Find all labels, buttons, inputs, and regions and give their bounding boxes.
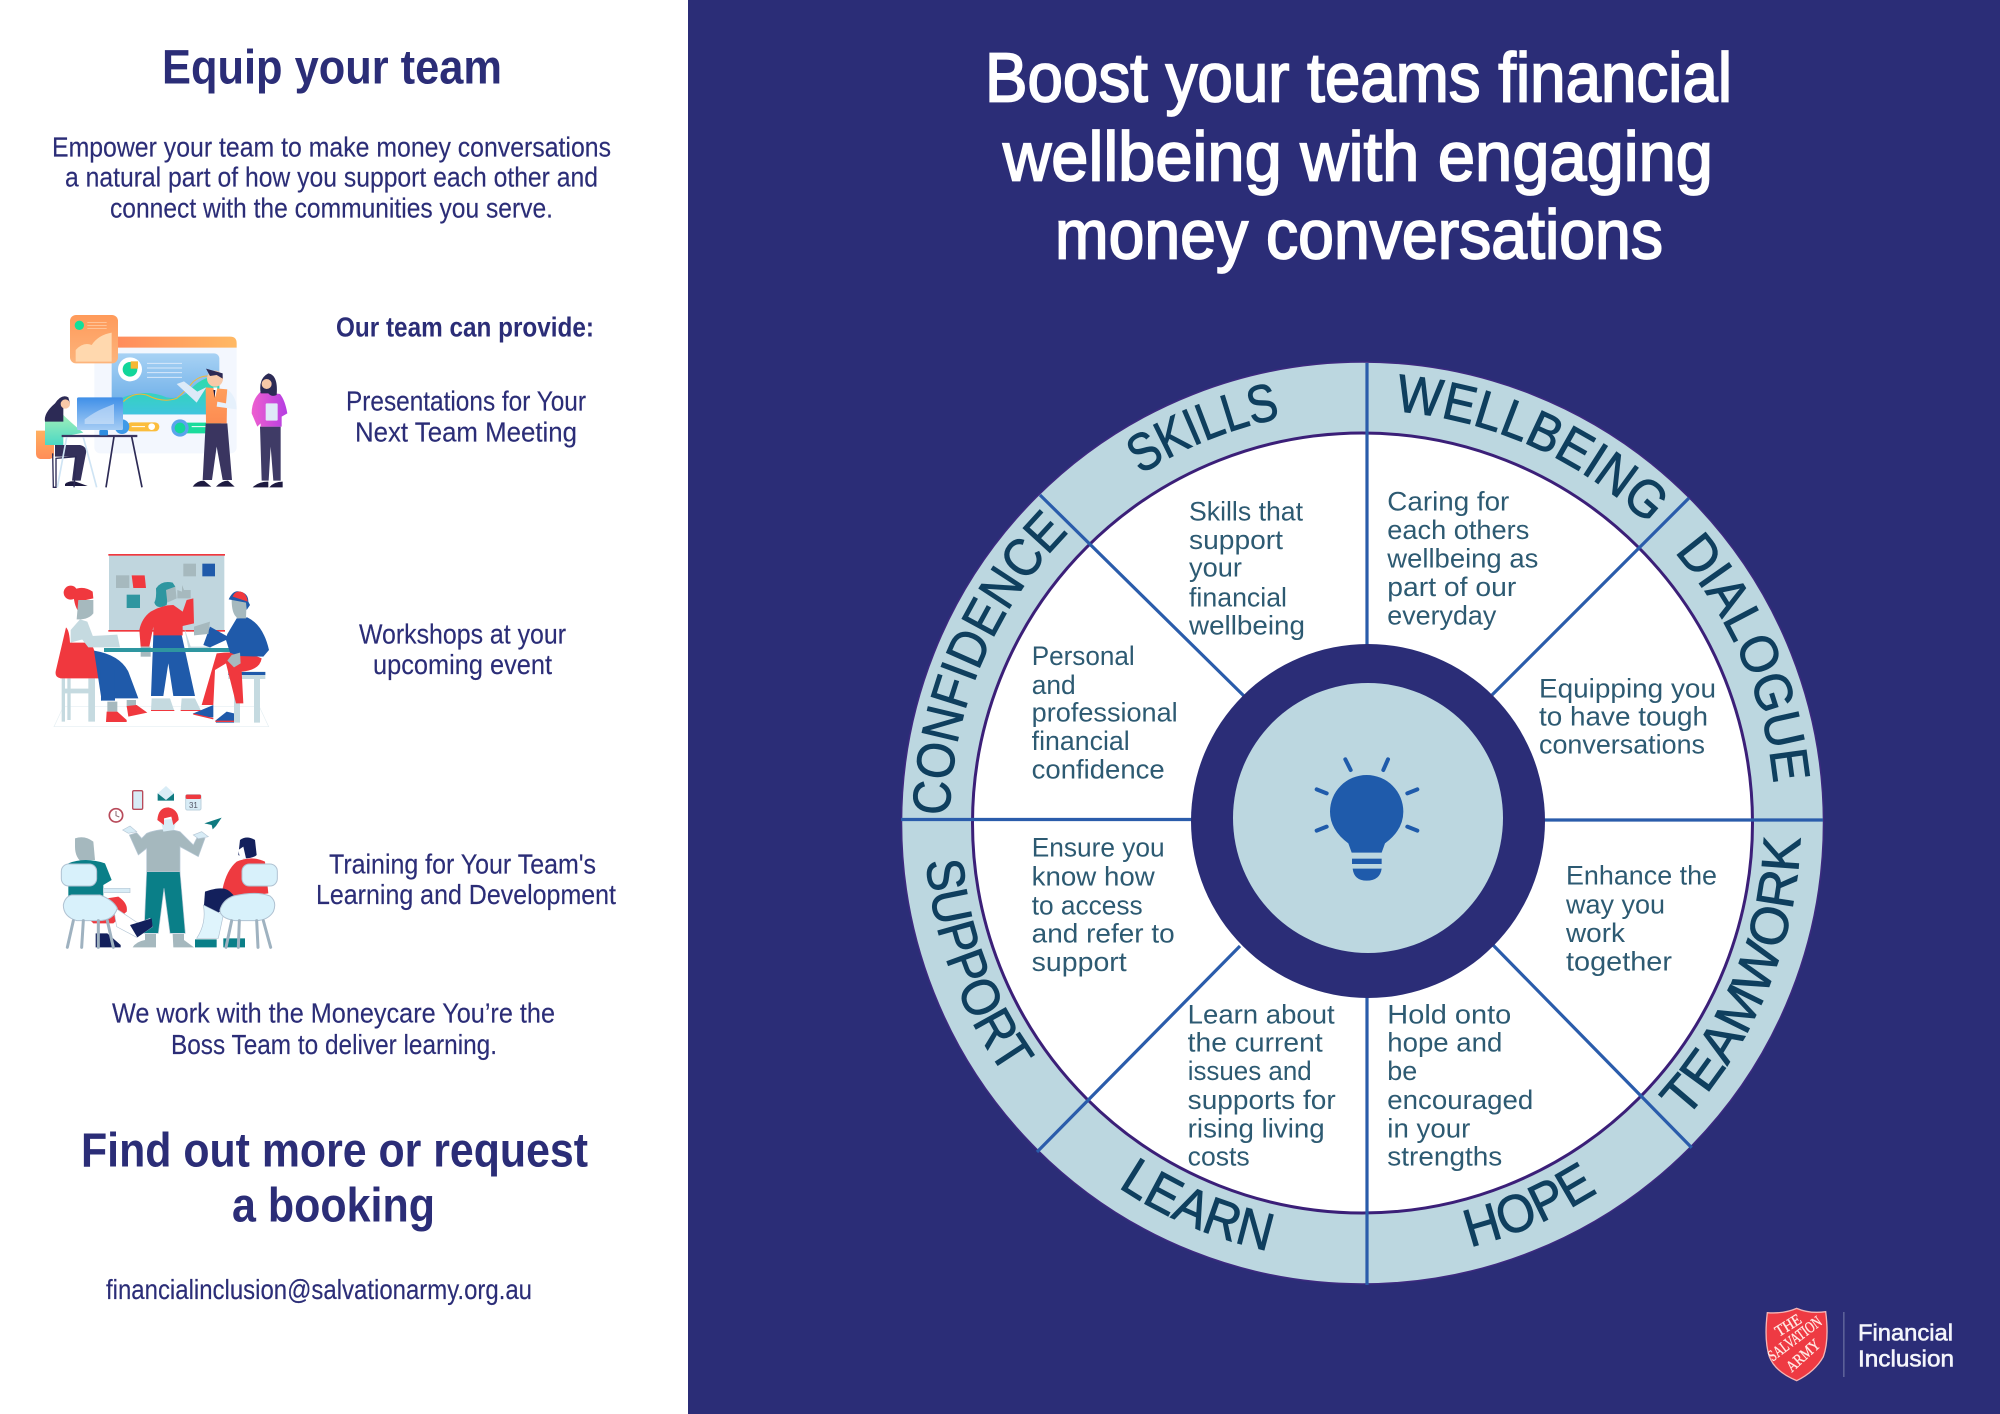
segment text: confidence: financial	[1032, 726, 1130, 756]
icon: red shield	[1766, 1308, 1827, 1381]
text: Workshops at your upcoming event: Workshops at your	[359, 618, 566, 649]
illustration: training conversation: 31	[189, 801, 198, 810]
segment text: teamwork: work	[1565, 918, 1626, 948]
title: wellbeing with engaging	[1002, 118, 1713, 196]
segment text: wellbeing: everyday	[1387, 600, 1497, 630]
illustration: training conversation	[61, 786, 277, 947]
segment text: learn: the current	[1188, 1028, 1323, 1058]
segment text: skills: your	[1189, 553, 1242, 583]
heading: find out more	[81, 1125, 588, 1233]
intro paragraph: connect with the communities you serve.	[110, 192, 553, 223]
segment text: skills	[1188, 497, 1305, 640]
logo: Salvation Army Financial Inclusion	[1765, 1308, 1954, 1381]
panel: left white column	[0, 0, 688, 1414]
text: Training for your team's learning and development: Learning and Development	[316, 879, 616, 910]
heading: find out more: a booking	[232, 1180, 435, 1233]
segment text: learn: costs	[1188, 1142, 1250, 1172]
segment text: hope: encouraged	[1387, 1085, 1533, 1115]
ring label: LEARN: LEARN	[1120, 1158, 1274, 1251]
title	[985, 39, 1732, 274]
segment text: skills: financial	[1189, 583, 1287, 613]
logo wordmark	[1858, 1320, 1954, 1372]
logo wordmark: Financial	[1858, 1320, 1953, 1346]
panel: right navy background	[688, 0, 2000, 1414]
hub centre	[1233, 683, 1503, 953]
spokes	[901, 363, 1823, 1285]
segment text: support: to access	[1032, 890, 1143, 920]
text: Presentations for your next team meeting	[346, 386, 586, 448]
intro paragraph: Empower your team to make money conversations	[52, 132, 611, 163]
segment text: learn	[1188, 999, 1336, 1172]
logo divider	[1843, 1312, 1845, 1377]
icon: light bulb	[1317, 759, 1417, 881]
text: Presentations for your next team meeting: Next Team Meeting	[355, 417, 577, 448]
segment text: support	[1032, 833, 1175, 977]
segment text: hope: strengths	[1387, 1142, 1502, 1172]
ring label: SKILLS: SKILLS	[1128, 384, 1278, 470]
outer ring	[902, 362, 1824, 1284]
segment text: confidence: Personal	[1032, 641, 1135, 671]
segment text: skills: wellbeing	[1188, 610, 1305, 640]
text: Moneycare partnership note	[112, 998, 555, 1060]
segment text: dialogue: Equipping you	[1539, 674, 1716, 704]
right seated person	[238, 837, 257, 858]
text: Moneycare partnership note: We work with the Moneycare You’re the	[112, 998, 555, 1029]
illustration: workshop around a table	[54, 554, 269, 727]
segment text: support: and refer to	[1032, 919, 1175, 949]
segment text: support: know how	[1032, 862, 1156, 892]
shield wording: SALVATION	[1765, 1313, 1826, 1365]
shield wording	[1765, 1311, 1826, 1376]
segment text: hope: in your	[1387, 1114, 1470, 1144]
shield wording: ARMY	[1783, 1336, 1824, 1376]
standing person	[144, 872, 185, 933]
segment text: learn: rising living	[1188, 1114, 1325, 1144]
segment text: wellbeing	[1386, 487, 1538, 630]
text: Workshops at your upcoming event	[359, 618, 566, 680]
white inner disc	[972, 433, 1752, 1213]
ring label: WELLBEING: WELLBEING	[1400, 374, 1666, 518]
contact email: financialinclusion@salvationarmy.org.au	[106, 1274, 532, 1305]
segment text: teamwork: together	[1566, 947, 1672, 977]
segment text: learn: Learn about	[1188, 999, 1335, 1029]
heading: Equip your team: Equip your team	[162, 42, 502, 94]
segment text: wellbeing: part of our	[1387, 572, 1516, 602]
segment text: skills: support	[1189, 525, 1284, 555]
segment text: hope	[1387, 999, 1533, 1172]
ring label: CONFIDENCE: CONFIDENCE	[912, 509, 1068, 813]
hub ring	[1191, 644, 1545, 998]
segment text: learn: issues and	[1188, 1056, 1312, 1086]
heading: find out more: Find out more or request	[81, 1125, 588, 1178]
illustration: team presenting a dashboard	[36, 315, 287, 487]
text: Our team can provide: Our team can provide:	[336, 312, 594, 343]
text: Moneycare partnership note: Boss Team to deliver learning.	[171, 1029, 497, 1060]
segment text: teamwork: Enhance the	[1566, 860, 1717, 890]
ring label: HOPE: HOPE	[1463, 1162, 1597, 1247]
segment text: wellbeing: wellbeing as	[1386, 543, 1538, 573]
text: Training for your team's learning and development: Training for Your Team's	[329, 848, 596, 879]
segment text: confidence	[1032, 641, 1178, 784]
segment text: teamwork: way you	[1565, 889, 1665, 919]
segment text: dialogue: conversations	[1539, 729, 1705, 759]
left seated person	[75, 837, 95, 863]
text: Training for your team's learning and development	[316, 848, 616, 910]
intro paragraph: a natural part of how you support each other and	[65, 162, 598, 193]
text: Workshops at your upcoming event: upcoming event	[373, 649, 552, 680]
segment text: confidence: and	[1032, 670, 1076, 700]
standing woman	[151, 635, 195, 696]
right man	[228, 672, 265, 723]
logo wordmark: Inclusion	[1858, 1346, 1954, 1372]
segment text: confidence: confidence	[1032, 754, 1165, 784]
colleague standing	[260, 427, 281, 481]
segment text: teamwork	[1565, 860, 1717, 977]
text: Presentations for your next team meeting: Presentations for Your	[346, 386, 586, 417]
title: Boost your teams financial	[985, 39, 1732, 117]
segment text: hope: Hold onto	[1387, 999, 1511, 1029]
segment text: dialogue: to have tough	[1539, 702, 1708, 732]
segment text: wellbeing: Caring for	[1387, 487, 1509, 517]
desk	[62, 432, 137, 439]
ring label: DIALOGUE: DIALOGUE	[1676, 532, 1810, 782]
segment text: confidence: professional	[1032, 698, 1178, 728]
left woman	[62, 678, 95, 722]
floating icons	[109, 809, 123, 822]
intro paragraph	[52, 132, 611, 223]
segment text: hope: be	[1387, 1056, 1417, 1086]
segment text: hope: hope and	[1387, 1028, 1502, 1058]
wheel diagram	[900, 362, 1824, 1285]
segment text: skills: Skills that	[1189, 497, 1304, 527]
segment text: wellbeing: each others	[1387, 515, 1529, 545]
segment text: support: support	[1032, 947, 1127, 977]
presenter	[203, 423, 232, 480]
title: money conversations	[1055, 196, 1663, 274]
segment text: learn: supports for	[1188, 1085, 1336, 1115]
segment text: support: Ensure you	[1032, 833, 1165, 863]
shield wording: THE	[1772, 1311, 1805, 1340]
segment text: dialogue	[1539, 674, 1716, 759]
ring label: SUPPORT: SUPPORT	[926, 861, 1035, 1066]
ring label: TEAMWORK: TEAMWORK	[1658, 836, 1802, 1110]
seated woman	[36, 431, 54, 459]
table and laptop	[104, 648, 241, 652]
